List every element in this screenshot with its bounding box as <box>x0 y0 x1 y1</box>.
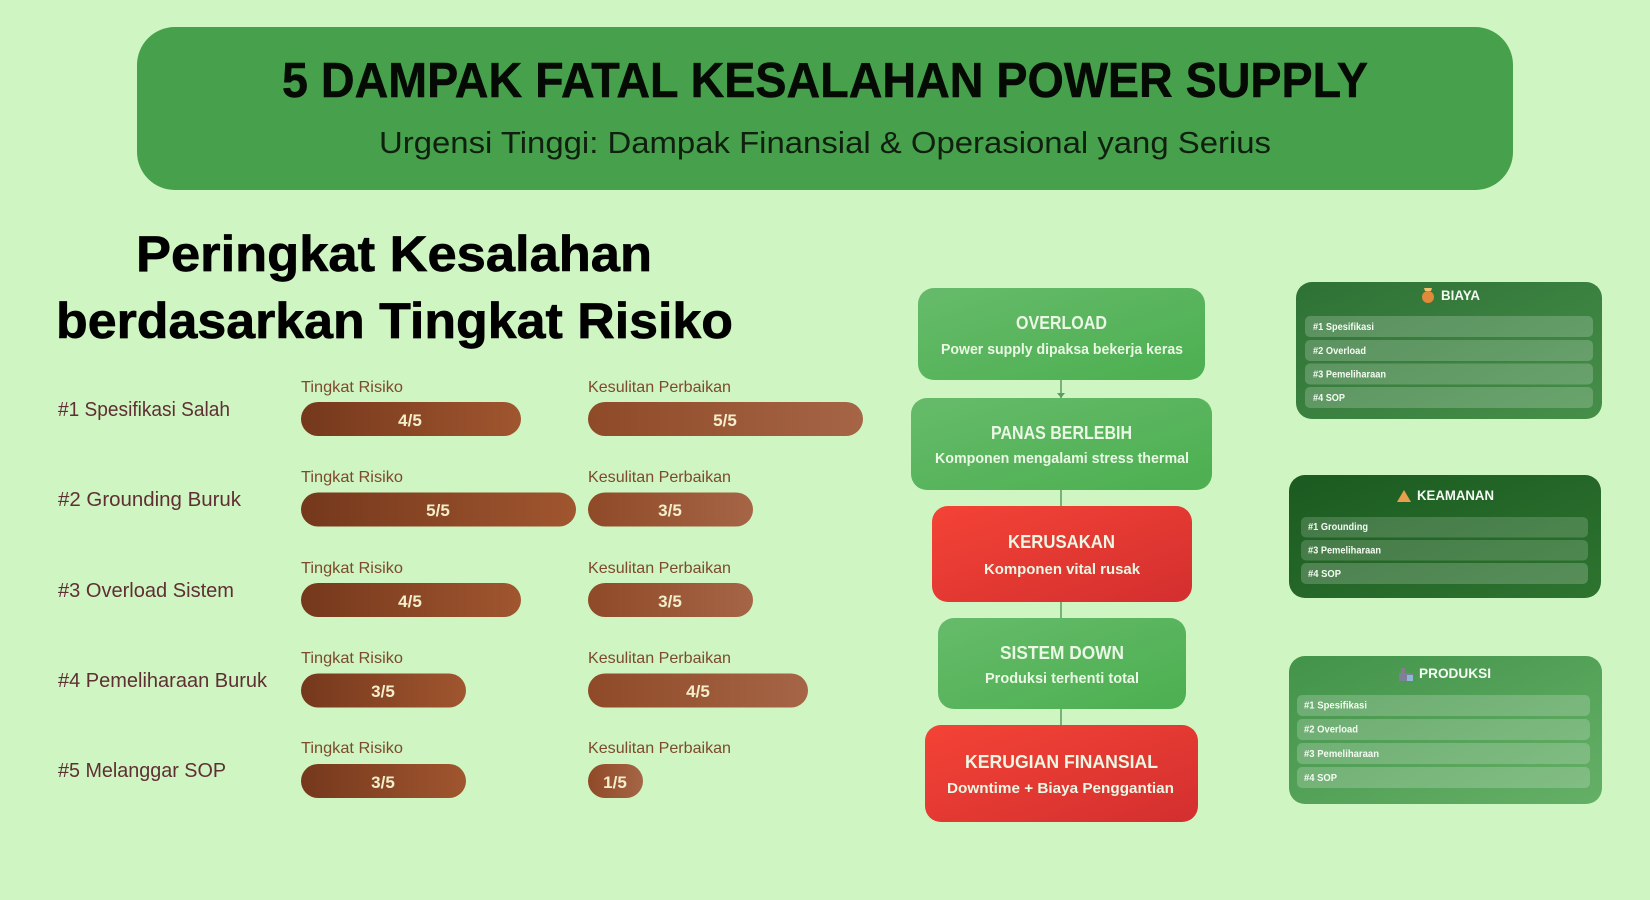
row 5: Melanggar SOP: #5 Melanggar SOP <box>58 760 226 782</box>
list: keamanan items: #4 SOP <box>1308 569 1341 580</box>
panel: failure flow <box>911 288 1212 822</box>
step: overload <box>918 288 1205 380</box>
row 5: Melanggar SOP: 1/5 <box>603 773 627 792</box>
list: produksi items: #3 Pemeliharaan <box>1304 749 1379 760</box>
row 2: Grounding Buruk: Tingkat Risiko <box>301 469 403 486</box>
step: sistem down: Produksi terhenti total <box>985 670 1139 687</box>
row 4: Pemeliharaan Buruk: 3/5 <box>371 682 395 701</box>
row 3: Overload Sistem: Kesulitan Perbaikan <box>588 560 731 577</box>
heading: produksi: PRODUKSI <box>1419 665 1491 681</box>
heading: ranking: Peringkat Kesalahan <box>136 226 652 282</box>
row 1: Spesifikasi Salah: #1 Spesifikasi Salah <box>58 399 230 421</box>
row 1: Spesifikasi Salah: 4/5 <box>398 411 422 430</box>
list: keamanan items: #1 Grounding <box>1308 522 1368 533</box>
arrow: sistem down to kerugian <box>1060 709 1062 725</box>
step: sistem down <box>938 618 1186 709</box>
icon: factory <box>1399 668 1413 681</box>
row 5: Melanggar SOP <box>58 740 731 798</box>
step: sistem down: SISTEM DOWN <box>1000 643 1124 663</box>
step: overload: Power supply dipaksa bekerja keras <box>941 341 1183 358</box>
arrow: kerusakan to sistem down <box>1060 602 1062 618</box>
list: biaya items: #1 Spesifikasi <box>1313 322 1374 333</box>
step: panas berlebih: PANAS BERLEBIH <box>991 423 1132 443</box>
list: biaya items <box>1305 316 1593 408</box>
step: overload: OVERLOAD <box>1016 313 1107 333</box>
panel: biaya <box>1296 282 1602 419</box>
row 3: Overload Sistem: 3/5 <box>658 592 682 611</box>
row 5: Melanggar SOP: 3/5 <box>371 773 395 792</box>
list: keamanan items: #3 Pemeliharaan <box>1308 546 1381 556</box>
row 2: Grounding Buruk: 5/5 <box>426 501 450 520</box>
list: biaya items: #3 Pemeliharaan <box>1313 370 1386 380</box>
arrow: panas to kerusakan <box>1060 490 1062 506</box>
list: produksi items: #1 Spesifikasi <box>1304 700 1367 712</box>
subtitle: Urgensi Tinggi: Dampak Finansial & Operasional yang Serius <box>379 125 1271 160</box>
heading: ranking: berdasarkan Tingkat Risiko <box>56 293 733 349</box>
list: produksi items <box>1297 695 1590 788</box>
row 4: Pemeliharaan Buruk <box>58 650 808 708</box>
step: kerugian finansial: Downtime + Biaya Penggantian <box>947 780 1174 797</box>
row 1: Spesifikasi Salah: 5/5 <box>713 411 737 430</box>
row 3: Overload Sistem: #3 Overload Sistem <box>58 580 234 602</box>
panel: keamanan <box>1289 475 1601 598</box>
heading: ranking <box>56 226 733 349</box>
row 2: Grounding Buruk: Kesulitan Perbaikan <box>588 469 731 486</box>
row 1: Spesifikasi Salah <box>58 379 863 436</box>
arrow: overload to panas <box>1057 380 1065 398</box>
row 3: Overload Sistem: 4/5 <box>398 592 422 611</box>
row 4: Pemeliharaan Buruk: Tingkat Risiko <box>301 650 403 667</box>
heading: keamanan: KEAMANAN <box>1417 487 1494 503</box>
panel: risk ranking <box>56 226 863 798</box>
step: panas berlebih <box>911 398 1212 490</box>
step: kerusakan: KERUSAKAN <box>1008 532 1115 552</box>
row 5: Melanggar SOP: Tingkat Risiko <box>301 740 403 757</box>
icon: warning triangle <box>1397 490 1411 502</box>
icon: money bag <box>1422 288 1434 303</box>
row 2: Grounding Buruk <box>58 469 753 526</box>
row 2: Grounding Buruk: #2 Grounding Buruk <box>58 489 242 511</box>
row 1: Spesifikasi Salah: Kesulitan Perbaikan <box>588 379 731 396</box>
heading: biaya: BIAYA <box>1441 287 1480 303</box>
list: produksi items: #2 Overload <box>1304 724 1358 736</box>
row 1: Spesifikasi Salah: Tingkat Risiko <box>301 379 403 396</box>
row 4: Pemeliharaan Buruk: 4/5 <box>686 682 710 701</box>
step: kerusakan: Komponen vital rusak <box>984 561 1141 578</box>
row 3: Overload Sistem <box>58 560 753 617</box>
panel: produksi <box>1289 656 1602 804</box>
row 4: Pemeliharaan Buruk: #4 Pemeliharaan Buruk <box>58 670 268 692</box>
step: kerugian finansial: KERUGIAN FINANSIAL <box>965 752 1158 772</box>
title: 5 DAMPAK FATAL KESALAHAN POWER SUPPLY <box>282 54 1368 108</box>
list: biaya items: #4 SOP <box>1313 393 1345 404</box>
list: produksi items: #4 SOP <box>1304 773 1337 784</box>
step: kerusakan <box>932 506 1192 602</box>
row 2: Grounding Buruk: 3/5 <box>658 501 682 520</box>
header banner <box>137 27 1513 190</box>
row 3: Overload Sistem: Tingkat Risiko <box>301 560 403 577</box>
row 4: Pemeliharaan Buruk: Kesulitan Perbaikan <box>588 650 731 667</box>
step: kerugian finansial <box>925 725 1198 822</box>
step: panas berlebih: Komponen mengalami stress thermal <box>935 450 1189 467</box>
list: biaya items: #2 Overload <box>1313 346 1366 357</box>
list: keamanan items <box>1301 517 1588 584</box>
row 5: Melanggar SOP: Kesulitan Perbaikan <box>588 740 731 757</box>
